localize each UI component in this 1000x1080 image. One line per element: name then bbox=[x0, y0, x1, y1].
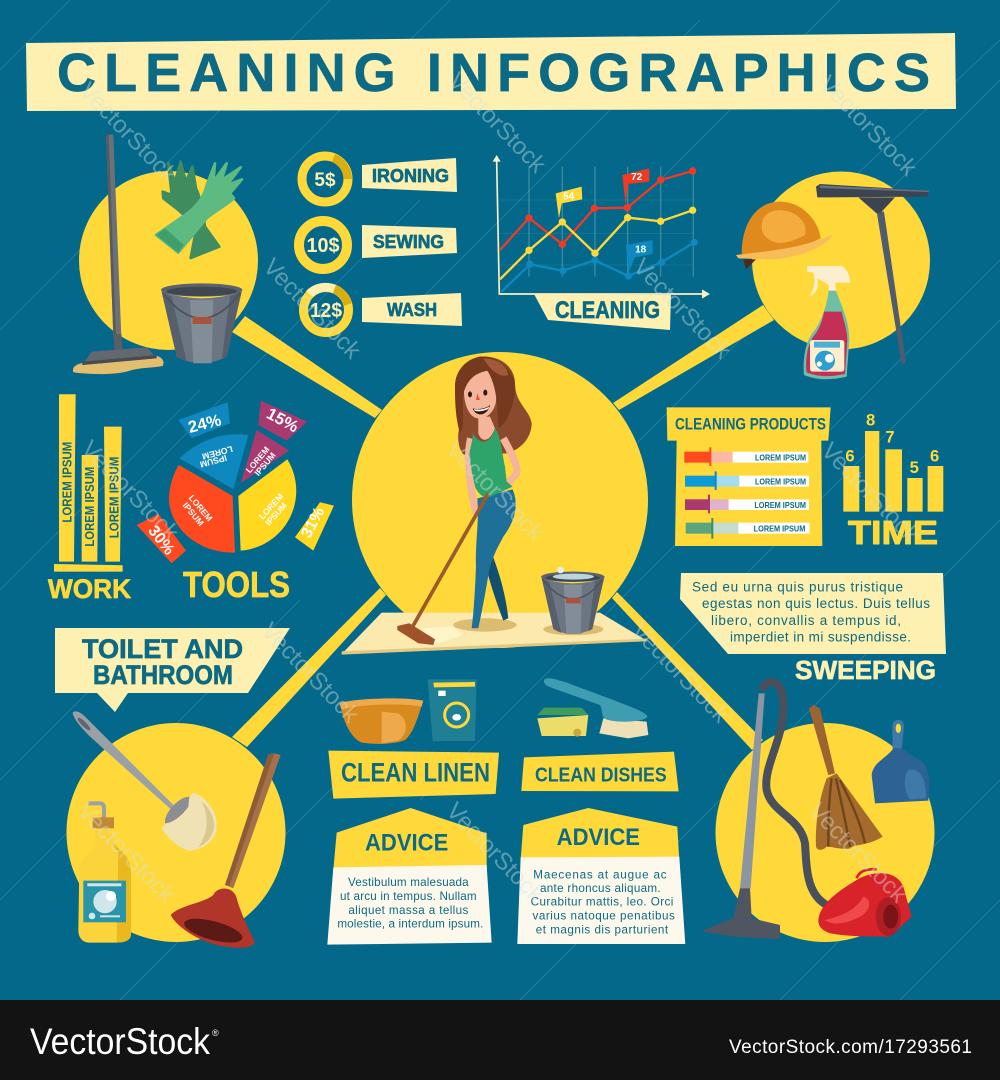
panel: advice linen: Vestibulum malesuada bbox=[348, 876, 469, 889]
watermarks: VectorStock bbox=[443, 67, 552, 179]
icon: vacuum, broom and dustpan bbox=[703, 682, 929, 939]
pie chart: tools bbox=[137, 401, 334, 563]
plunger bbox=[171, 754, 281, 948]
watermarks: VectorStock bbox=[814, 70, 923, 182]
flag: 18 bbox=[626, 240, 653, 273]
row 3: LOREM IPSUM bbox=[754, 500, 806, 510]
yellow series bbox=[500, 207, 696, 279]
label: wash: WASH bbox=[387, 300, 437, 320]
bar chart: time bbox=[843, 410, 943, 512]
toilet brush bbox=[73, 711, 217, 851]
bar values: 6 bbox=[930, 446, 939, 465]
bar values: 6 bbox=[845, 447, 855, 466]
heading: tools: TOOLS bbox=[183, 564, 290, 605]
soap bottle bbox=[78, 803, 131, 943]
label: wash bbox=[362, 293, 462, 326]
watermarks: VectorStock bbox=[628, 253, 737, 365]
pie slice red: IPSUM bbox=[181, 500, 206, 528]
coin: 5$: 5$ bbox=[314, 170, 336, 191]
bucket bbox=[161, 283, 242, 363]
panel: advice dishes: Curabitur mattis, leo. Orci bbox=[531, 896, 673, 909]
coin: 10$ bbox=[299, 221, 347, 269]
pie slice purple: LOREM bbox=[244, 445, 272, 475]
panel: advice linen bbox=[327, 808, 492, 945]
label: clean linen: CLEAN LINEN bbox=[341, 758, 490, 788]
coin: 12$: 12$ bbox=[310, 300, 342, 322]
label: clean dishes bbox=[521, 752, 679, 791]
heading: work: WORK bbox=[48, 574, 131, 604]
panel: advice dishes: varius natoque penatibus bbox=[532, 909, 675, 922]
bar values bbox=[845, 410, 939, 477]
woman bbox=[455, 357, 532, 628]
bar values: 5 bbox=[910, 458, 919, 477]
icon: tub and detergent bbox=[327, 678, 685, 945]
title banner: CLEANING INFOGRAPHICS bbox=[57, 43, 930, 103]
blue series bbox=[502, 239, 698, 292]
helmet bbox=[736, 202, 833, 269]
mop bbox=[397, 493, 488, 645]
bar labels bbox=[61, 442, 121, 547]
bucket with water bbox=[541, 567, 605, 634]
scene: woman mopping bbox=[342, 357, 647, 655]
label: sewing: SEWING bbox=[373, 232, 444, 252]
broom bbox=[809, 705, 883, 850]
row 2: LOREM IPSUM bbox=[755, 476, 806, 486]
callout: toilet and bathroom bbox=[55, 628, 290, 712]
watermarks: VectorStock bbox=[256, 617, 365, 729]
squeegee bbox=[816, 184, 929, 364]
bar chart: work bbox=[54, 394, 123, 572]
coin: 5$ bbox=[302, 154, 352, 202]
watermarks: VectorStock bbox=[626, 617, 735, 729]
flag: 72 bbox=[622, 168, 649, 205]
yellow circle bottom left bbox=[66, 723, 286, 942]
pie slice yellow: LOREM bbox=[257, 491, 285, 521]
panel: advice dishes: Maecenas at augue ac bbox=[533, 868, 667, 881]
panel: advice dishes bbox=[517, 808, 685, 944]
bar labels: LOREM IPSUM bbox=[107, 457, 121, 538]
callout: toilet and bathroom: BATHROOM bbox=[93, 660, 233, 690]
label: cleaning: CLEANING bbox=[555, 297, 660, 324]
icon: toilet brush, bottle and plunger bbox=[73, 711, 281, 948]
row 3 bbox=[685, 495, 809, 513]
text box: sweeping: imperdiet in mi suspendisse. bbox=[730, 630, 911, 644]
pie slice blue: IPSUM bbox=[199, 453, 228, 470]
tag: 30%: 30% bbox=[144, 523, 177, 558]
heading: time: TIME bbox=[848, 514, 938, 551]
bar values: 7 bbox=[885, 428, 895, 447]
watermarks: VectorStock bbox=[816, 437, 925, 549]
red series bbox=[500, 167, 696, 250]
watermarks: VectorStock bbox=[76, 435, 185, 547]
row 1 bbox=[684, 447, 808, 466]
watermarks: VectorStock bbox=[441, 797, 550, 909]
line chart: cleaning bbox=[493, 155, 710, 299]
row 4: LOREM IPSUM bbox=[754, 524, 805, 534]
row 1: LOREM IPSUM bbox=[755, 452, 806, 462]
pie slice purple bbox=[241, 430, 289, 483]
text box: sweeping: egestas non quis lectus. Duis tellus bbox=[702, 596, 930, 611]
footer bar: ® bbox=[212, 1028, 219, 1038]
pie slice blue bbox=[179, 434, 248, 489]
panel: advice linen: ADVICE bbox=[365, 830, 448, 857]
bar labels: LOREM IPSUM bbox=[83, 467, 97, 547]
watermarks bbox=[72, 67, 925, 909]
vacuum cleaner bbox=[703, 682, 912, 939]
gloves bbox=[156, 162, 242, 258]
row 2 bbox=[685, 471, 809, 490]
footer bar bbox=[0, 1000, 1000, 1080]
label: ironing: IRONING bbox=[372, 166, 449, 186]
flag: 72: 72 bbox=[631, 172, 643, 183]
panel: advice linen: aliquet massa a tellus bbox=[348, 904, 468, 917]
flag: 54: 54 bbox=[563, 191, 575, 202]
tag: 30% bbox=[137, 514, 186, 563]
watermarks: VectorStock bbox=[72, 797, 181, 909]
flag: 18: 18 bbox=[635, 245, 647, 256]
pie slice yellow bbox=[238, 459, 296, 551]
tub bbox=[339, 698, 423, 744]
tag: 31%: 31% bbox=[298, 505, 328, 541]
label: clean linen bbox=[328, 751, 499, 799]
yellow circle centre bbox=[352, 352, 648, 648]
panel: cleaning products bbox=[667, 407, 831, 546]
pie slice yellow: IPSUM bbox=[263, 500, 289, 527]
flag: 54 bbox=[556, 187, 582, 218]
yellow circle bottom right bbox=[716, 723, 934, 942]
callout: toilet and bathroom: TOILET AND bbox=[82, 634, 243, 664]
tag: 31% bbox=[295, 502, 334, 551]
spray bottle bbox=[804, 266, 850, 379]
pie slice red: LOREM bbox=[187, 493, 214, 523]
chart axes bbox=[493, 155, 710, 299]
pie slice blue: LOREM bbox=[201, 444, 234, 462]
watermarks: VectorStock bbox=[74, 77, 183, 189]
icon: mop, gloves and bucket bbox=[73, 135, 242, 374]
footer bar: VectorStock.com/17293561 bbox=[729, 1037, 972, 1058]
row 4 bbox=[686, 518, 810, 539]
sponge bbox=[537, 708, 588, 737]
yellow circle top left bbox=[79, 171, 258, 350]
text box: sweeping: libero, convallis a tempus id, bbox=[711, 613, 901, 628]
panel: advice dishes: et magnis dis parturient bbox=[536, 923, 669, 936]
pie slice purple: IPSUM bbox=[252, 450, 278, 478]
heading: sweeping: SWEEPING bbox=[795, 655, 936, 685]
tag: 24% bbox=[178, 402, 230, 438]
floor bbox=[342, 613, 647, 655]
text box: sweeping: Sed eu urna quis purus tristique bbox=[692, 580, 903, 594]
panel: cleaning products: CLEANING PRODUCTS bbox=[675, 414, 826, 433]
panel: advice linen: ut arcu in tempus. Nullam bbox=[340, 890, 477, 903]
label: clean dishes: CLEAN DISHES bbox=[535, 764, 667, 787]
pie slice red bbox=[169, 465, 235, 553]
coin: 12$ bbox=[304, 283, 352, 332]
footer bar: VectorStock bbox=[30, 1021, 210, 1062]
dustpan bbox=[872, 720, 929, 803]
panel: advice dishes: ADVICE bbox=[557, 824, 640, 851]
label: ironing bbox=[362, 158, 457, 192]
tag: 15% bbox=[258, 401, 307, 441]
coin: 10$: 10$ bbox=[306, 235, 340, 257]
dish brush bbox=[544, 678, 648, 738]
mop bbox=[73, 135, 164, 374]
icon: helmet, squeegee and spray bbox=[736, 184, 929, 379]
label: cleaning bbox=[534, 294, 671, 330]
bar values: 8 bbox=[866, 410, 875, 429]
watermarks: VectorStock bbox=[441, 435, 550, 547]
yellow circle top right bbox=[752, 172, 930, 350]
connector bands bbox=[232, 305, 774, 750]
panel: advice linen: molestie, a interdum ipsum. bbox=[337, 918, 483, 931]
detergent box bbox=[428, 679, 477, 741]
tag: 24%: 24% bbox=[186, 410, 223, 437]
watermarks: VectorStock bbox=[804, 797, 913, 909]
bar labels: LOREM IPSUM bbox=[61, 442, 75, 523]
watermarks: VectorStock bbox=[258, 253, 367, 365]
panel: advice dishes: ante rhoncus aliquam. bbox=[540, 882, 661, 895]
label: sewing bbox=[362, 225, 457, 258]
text box: sweeping bbox=[680, 573, 946, 654]
tag: 15%: 15% bbox=[263, 404, 302, 436]
